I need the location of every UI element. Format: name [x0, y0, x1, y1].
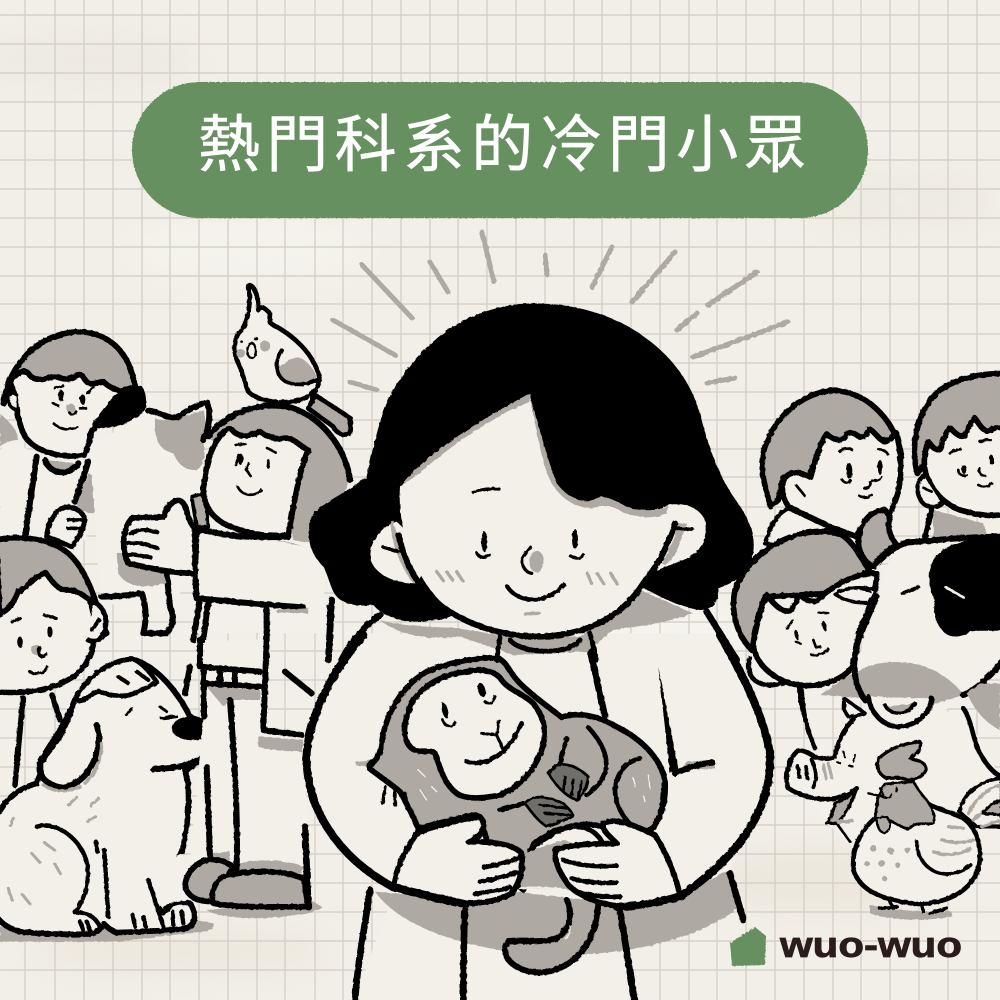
woman torso and arms [307, 633, 770, 1000]
monkey hands [548, 764, 588, 800]
person: boy top right [762, 391, 902, 547]
main woman body [307, 633, 770, 1000]
person: girl far right [914, 373, 1000, 538]
woman face [400, 393, 674, 634]
woman right hand [555, 821, 680, 906]
monkey body [369, 658, 665, 890]
person: boy at left [0, 538, 107, 633]
person: girl holding dog with parrot [117, 406, 350, 640]
logo [730, 924, 962, 966]
parrot [235, 285, 351, 435]
radiating highlight lines [333, 232, 788, 390]
title pill [132, 82, 868, 218]
woman left hand [393, 817, 522, 903]
monkey tail [505, 900, 598, 972]
pig [787, 683, 1000, 847]
main woman head [309, 303, 754, 660]
logo house icon [730, 927, 766, 966]
logo wordmark: wuo-wuo [779, 924, 962, 965]
cow [820, 510, 1000, 720]
person: top-left girl [0, 332, 147, 547]
title text: 熱門科系的冷門小眾 [198, 111, 813, 180]
sitting dog [0, 659, 214, 942]
held dog body and ear [90, 402, 209, 633]
person: boy centre right [734, 531, 877, 720]
gray lap band [375, 870, 740, 955]
person trousers and shoes [185, 640, 322, 918]
rooster [853, 742, 1000, 920]
monkey face [405, 670, 545, 798]
woman ears [370, 522, 433, 583]
woman hair [309, 303, 754, 622]
